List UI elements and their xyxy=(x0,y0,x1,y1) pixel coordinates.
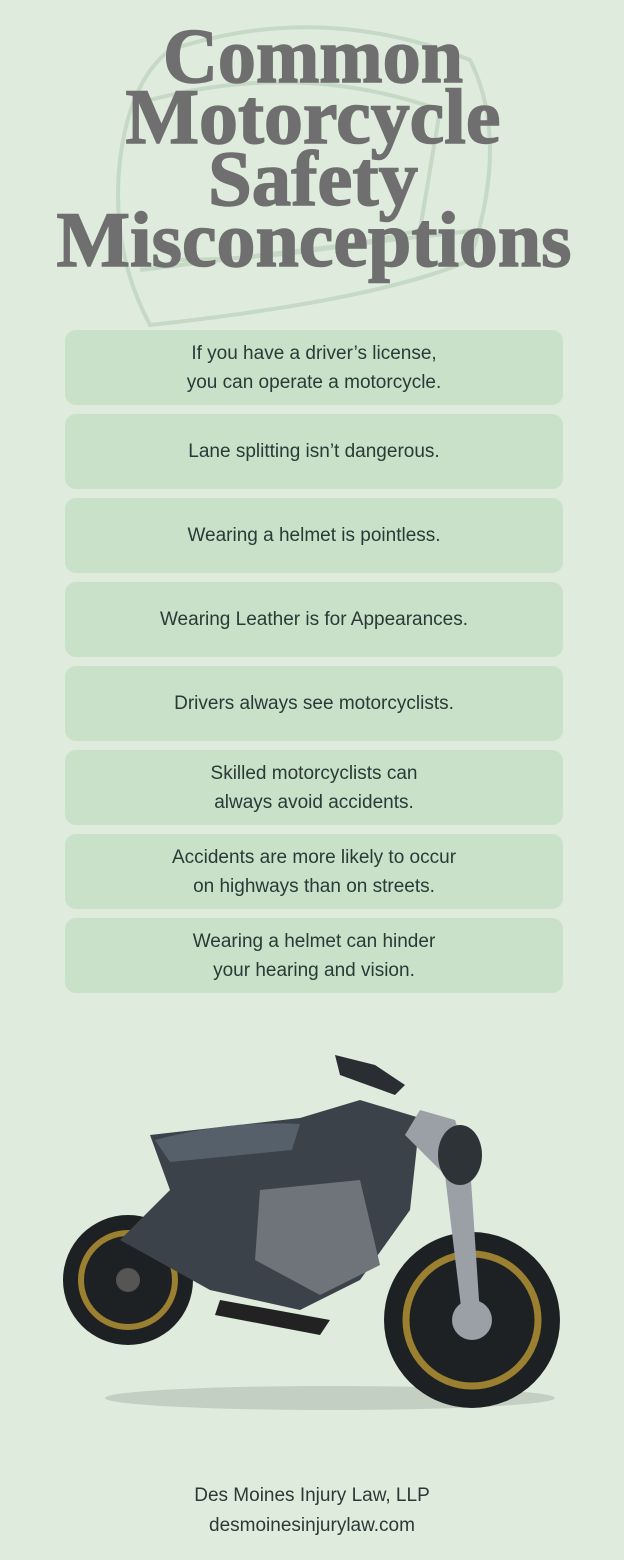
box 3 xyxy=(65,498,563,573)
box 6: always avoid accidents. xyxy=(214,792,414,812)
box 2 xyxy=(65,414,563,489)
footer url: desmoinesinjurylaw.com xyxy=(209,1515,415,1536)
box 5: Drivers always see motorcyclists. xyxy=(174,693,454,714)
box 1 xyxy=(65,330,563,405)
box 1: you can operate a motorcycle. xyxy=(187,372,441,392)
box 2: Lane splitting isn’t dangerous. xyxy=(188,441,440,462)
title xyxy=(56,12,572,284)
box 4: Wearing Leather is for Appearances. xyxy=(160,609,468,630)
box 5 xyxy=(65,666,563,741)
title: Common xyxy=(163,12,463,99)
box 1: If you have a driver’s license, xyxy=(191,342,437,364)
box 6: Skilled motorcyclists can xyxy=(211,762,417,784)
box 7: Accidents are more likely to occur xyxy=(172,846,456,868)
footer firm name: Des Moines Injury Law, LLP xyxy=(194,1485,430,1506)
motorcycle illustration xyxy=(63,1055,560,1410)
title: Misconceptions xyxy=(56,196,572,283)
box 7 xyxy=(65,834,563,909)
box 8: Wearing a helmet can hinder xyxy=(193,930,435,952)
helmet watermark xyxy=(116,25,492,327)
box 3: Wearing a helmet is pointless. xyxy=(187,525,441,546)
box 4 xyxy=(65,582,563,657)
box 8 xyxy=(65,918,563,993)
title: Motorcycle xyxy=(126,73,500,160)
title: Safety xyxy=(208,135,418,222)
box 8: your hearing and vision. xyxy=(213,960,415,980)
box 6 xyxy=(65,750,563,825)
box 7: on highways than on streets. xyxy=(193,876,435,896)
